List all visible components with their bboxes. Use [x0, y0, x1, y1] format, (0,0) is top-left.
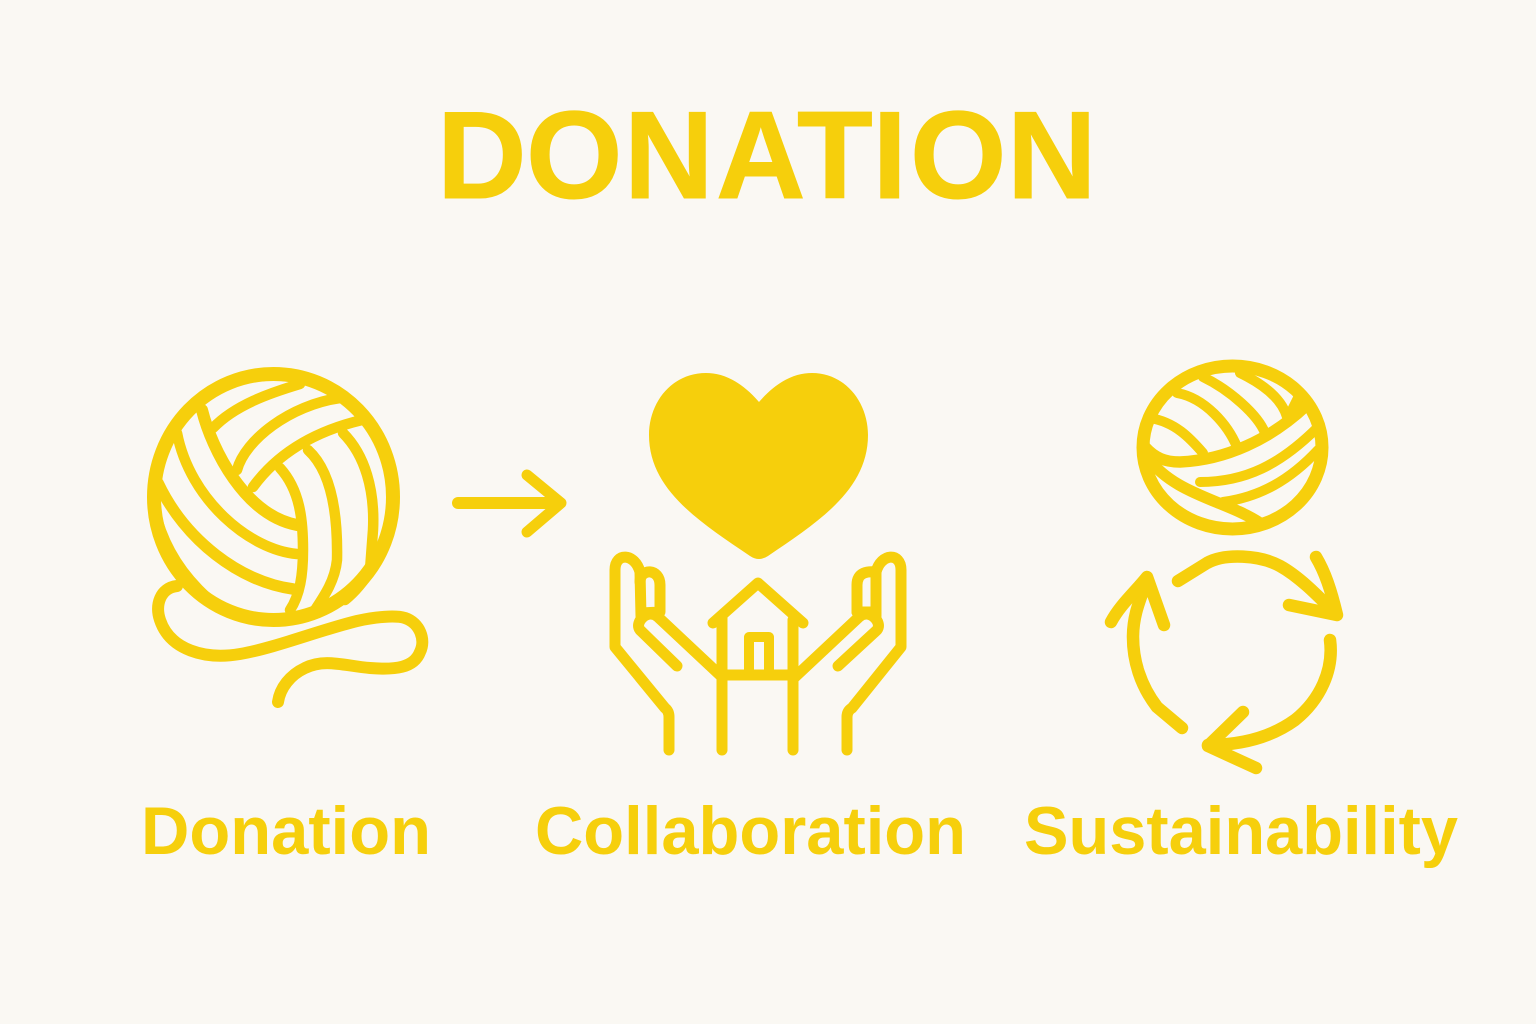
label: Collaboration: Collaboration — [535, 793, 966, 869]
icon: recycling arrows — [1111, 557, 1337, 768]
title: DONATION — [437, 87, 1097, 225]
small ball outline — [1143, 366, 1322, 529]
right hand — [795, 557, 901, 750]
top arrow — [1178, 557, 1337, 615]
yarn ball outline — [154, 374, 393, 620]
yarn ball strands — [157, 384, 373, 610]
icon: yarn ball with loose thread — [154, 374, 422, 702]
right arrow — [1208, 640, 1331, 768]
house — [713, 583, 803, 750]
loose thread — [158, 586, 422, 702]
left hand — [615, 557, 722, 750]
small ball strands — [1145, 373, 1318, 523]
icon: heart — [649, 373, 868, 559]
arrow: donation to collaboration — [458, 475, 561, 532]
label: Donation: Donation — [141, 793, 431, 869]
icon: hands holding house — [615, 557, 901, 750]
left arrow — [1111, 577, 1182, 728]
icon: yarn ball small — [1143, 366, 1322, 529]
label: Sustainability: Sustainability — [1024, 793, 1458, 869]
